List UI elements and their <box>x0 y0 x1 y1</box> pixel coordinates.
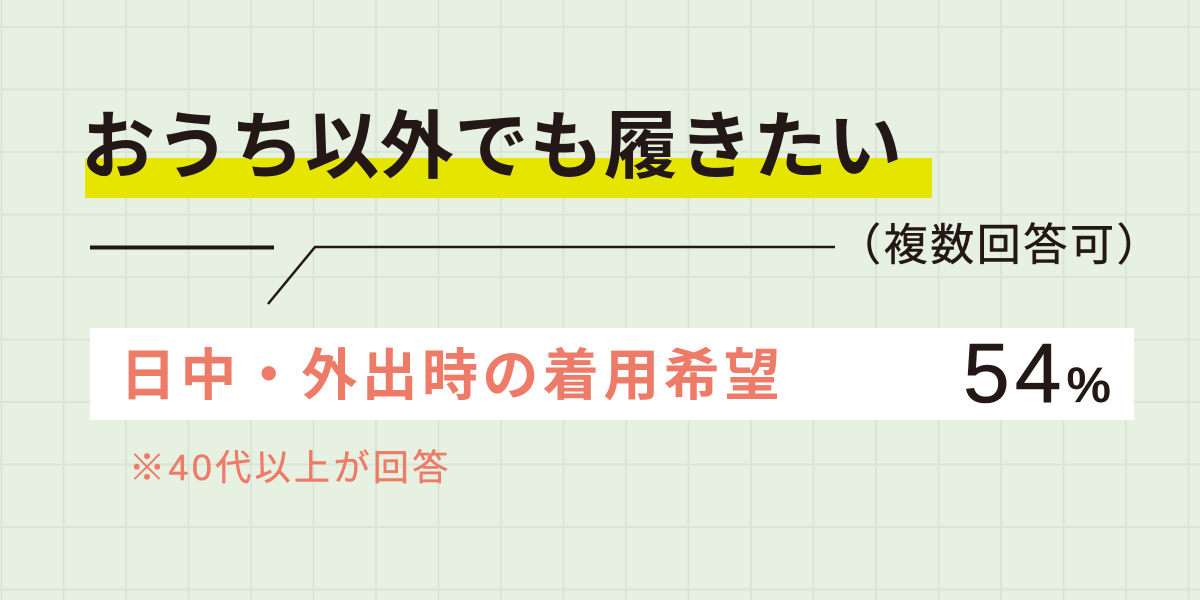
footnote: ※40代以上が回答 <box>129 447 452 488</box>
result panel <box>90 328 1134 420</box>
title highlight bar <box>85 158 932 198</box>
result value: 54% <box>963 326 1111 420</box>
result label: 日中・外出時の着用希望 <box>120 344 784 407</box>
subtitle: multiple answers allowed: （複数回答可） <box>837 221 1163 270</box>
title: おうち以外でも履きたい <box>81 105 903 188</box>
